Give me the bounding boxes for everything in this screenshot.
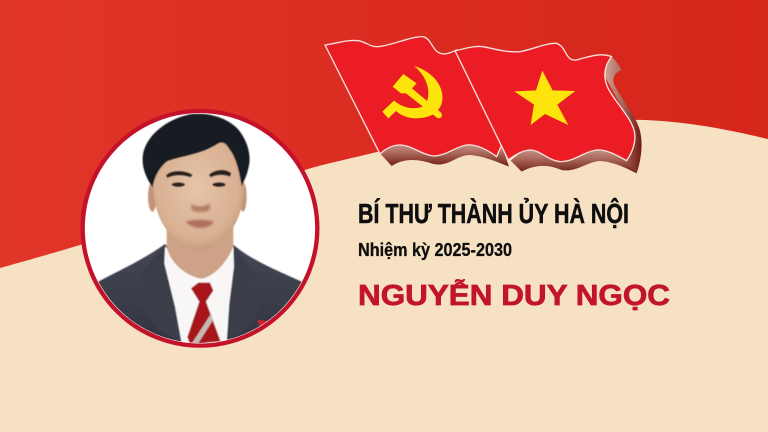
portrait ring <box>83 111 317 346</box>
eyes <box>172 182 185 187</box>
flag fold shadow: national flag right <box>603 57 642 173</box>
subheading: term: Nhiệm kỳ 2025-2030 <box>358 240 512 260</box>
party flag <box>325 37 502 157</box>
tie <box>187 283 221 344</box>
flag body <box>455 43 635 162</box>
mouth <box>186 220 214 228</box>
neck <box>167 227 233 279</box>
nose <box>191 203 210 212</box>
icon: hammer and sickle <box>382 66 442 118</box>
eyebrows <box>166 171 193 178</box>
suit <box>98 244 302 343</box>
lapel shadow <box>156 245 180 341</box>
flag fold shadow: party flag <box>380 140 509 167</box>
national flag <box>455 43 635 162</box>
flag fold shadow: national flag bottom <box>511 145 637 173</box>
ears <box>148 182 157 212</box>
heading: position title: BÍ THƯ THÀNH ỦY HÀ NỘI <box>358 197 629 229</box>
face <box>153 142 244 242</box>
icon: yellow star <box>514 71 575 125</box>
hair <box>143 114 250 187</box>
portrait figure <box>97 114 303 353</box>
name: NGUYỄN DUY NGỌC <box>358 278 670 312</box>
shirt <box>164 244 234 343</box>
flag body <box>325 37 502 157</box>
flag pin <box>257 320 268 329</box>
flags: party and national <box>325 37 642 173</box>
portrait: circular photo <box>83 111 317 353</box>
background: red curved band <box>0 0 768 268</box>
